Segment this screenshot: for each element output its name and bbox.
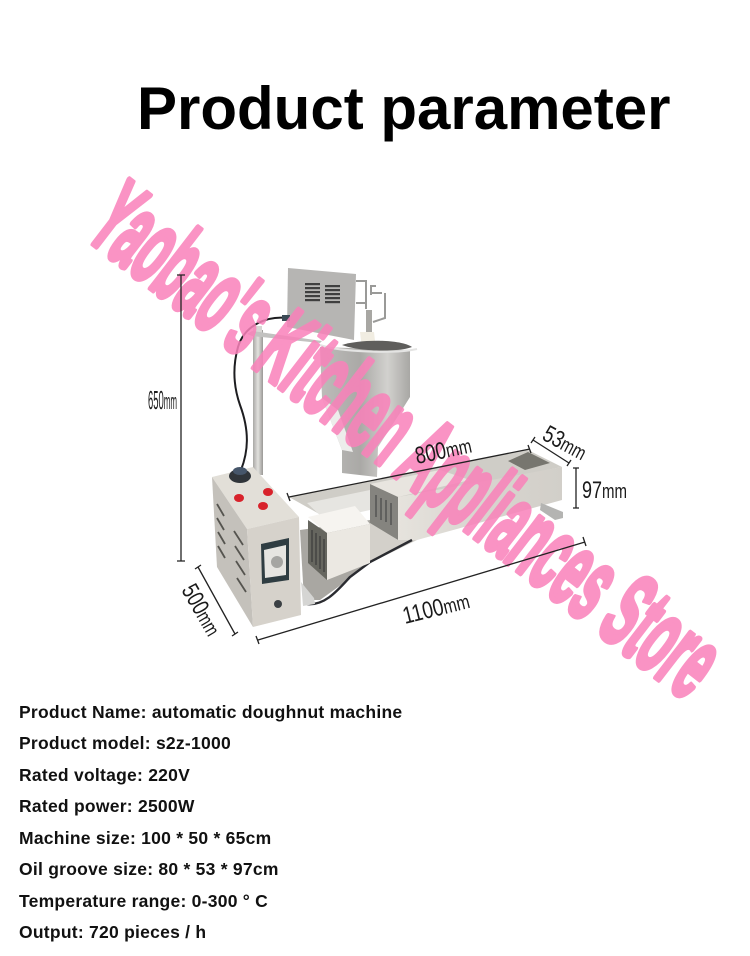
spec: temperature: Temperature range: 0-300 ° C [19, 891, 268, 911]
spec: machine size: Machine size: 100 * 50 * 65cm [19, 828, 271, 848]
heater block [308, 506, 370, 580]
control box [212, 467, 301, 627]
dimension labels: 97mm [582, 477, 627, 504]
power cord [234, 318, 287, 470]
hopper [320, 341, 417, 477]
dimension lines [177, 275, 586, 644]
spec: model: Product model: s2z-1000 [19, 733, 231, 753]
spec: voltage: Rated voltage: 220V [19, 765, 190, 785]
upper motor panel [287, 268, 385, 350]
dimension labels: 650mm [148, 385, 177, 415]
title: Product parameter [137, 75, 670, 142]
spec: output: Output: 720 pieces / h [19, 922, 206, 942]
lower body under heater [300, 520, 370, 600]
machine [212, 268, 563, 627]
inner trough [289, 450, 562, 520]
dimension labels: 53mm [538, 420, 591, 466]
hopper shelf [247, 331, 322, 343]
bracket [301, 582, 315, 606]
dimension labels: 1100mm [400, 587, 472, 630]
red buttons [234, 494, 244, 502]
timer dial [261, 538, 289, 584]
dimension labels: 500mm [176, 580, 227, 641]
spec: oil groove: Oil groove size: 80 * 53 * 97cm [19, 859, 279, 879]
fryer trough [289, 450, 563, 606]
dimension labels [148, 385, 627, 641]
pole [253, 330, 263, 475]
specification list [19, 702, 402, 942]
spec: product name: Product Name: automatic doughnut machine [19, 702, 402, 722]
rear heater block [370, 470, 470, 497]
spec: power: Rated power: 2500W [19, 796, 195, 816]
long front face [398, 467, 562, 540]
knob [229, 469, 251, 483]
cable [307, 540, 412, 604]
foot [540, 503, 563, 520]
dimension labels: 800mm [413, 432, 474, 470]
